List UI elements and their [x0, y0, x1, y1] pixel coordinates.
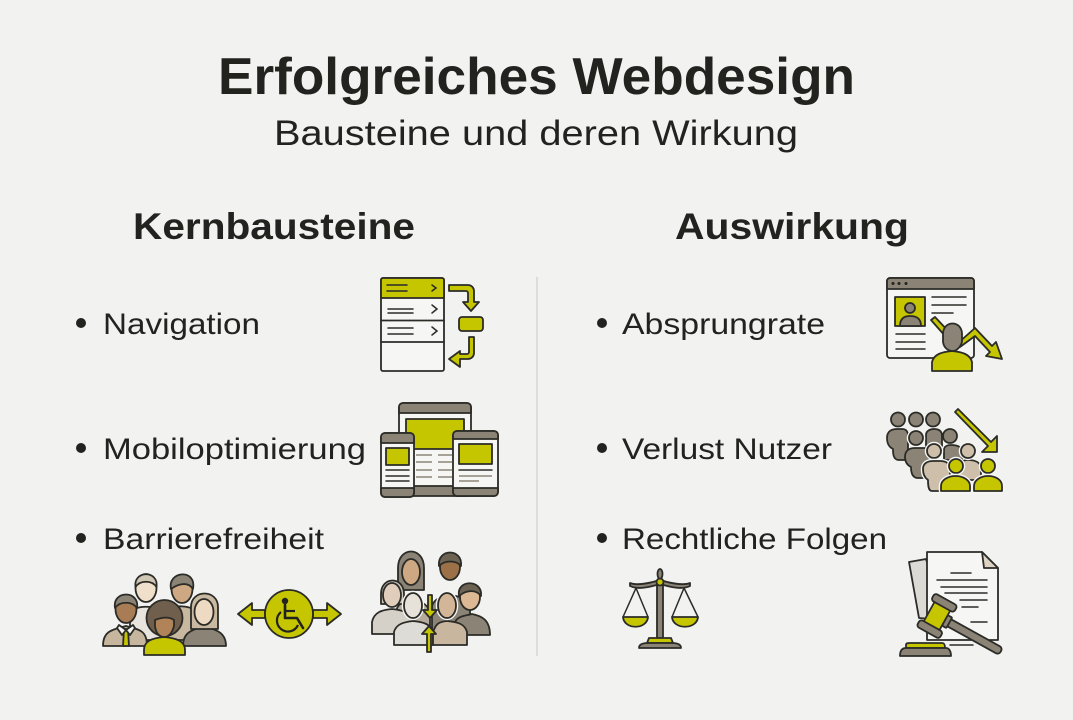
heading: Auswirkung: Auswirkung: [675, 206, 909, 247]
list item: Navigation: Navigation: [103, 308, 260, 341]
icon: bouncing user from website: [887, 278, 1002, 371]
list item: Absprungrate: Absprungrate: [622, 308, 825, 341]
icon: scales of justice: [623, 569, 698, 648]
icon: legal document with gavel: [900, 552, 1010, 668]
panel: Kernbausteine: [76, 206, 498, 655]
panel: Auswirkung: [597, 206, 1010, 668]
heading: Kernbausteine: Kernbausteine: [133, 206, 415, 247]
list item: Rechtliche Folgen: Rechtliche Folgen: [622, 523, 887, 556]
subtitle: Bausteine und deren Wirkung: [274, 114, 798, 153]
icon: inclusive people group: [372, 552, 490, 652]
list item: Mobiloptimierung: Mobiloptimierung: [103, 433, 366, 466]
title: Erfolgreiches Webdesign: [218, 48, 855, 106]
icon: loss of users: [887, 409, 1002, 491]
icon: navigation menu: [381, 278, 483, 371]
icon: diverse people group: [103, 574, 226, 655]
list item: Verlust Nutzer: Verlust Nutzer: [622, 433, 832, 466]
icon: wheelchair accessibility with arrows: [238, 590, 341, 638]
list item: Barrierefreiheit: Barrierefreiheit: [103, 523, 325, 556]
icon: responsive devices: [381, 403, 498, 497]
